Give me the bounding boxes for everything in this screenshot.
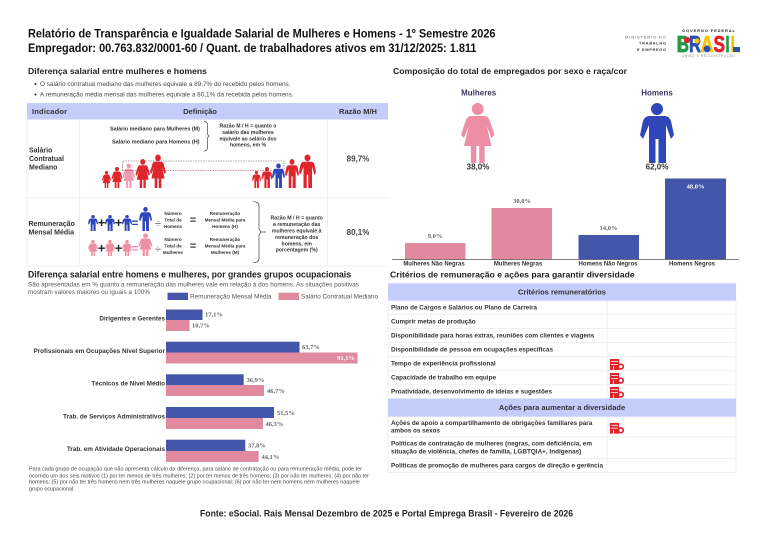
bullets: A remuneração média mensal das mulheres equivale a 80,1% da recebida pelos homens. — [40, 92, 294, 98]
footnote: ocorrido um dos seis motivos (1) por ter menos de três mulheres; (2) por ter menos de três homens; (3) por não ter mulheres; (4) por não ter — [29, 473, 369, 479]
row: remuneração mensal média: = — [131, 216, 139, 230]
logo: ministério: MINISTÉRIO DO — [625, 35, 666, 40]
group: profissionais: 91,1% — [337, 355, 355, 362]
row: remuneração mensal média: Razão M / H = quanto — [271, 216, 323, 222]
title: Empregador: 00.763.832/0001-60 / Quant. de trabalhadores ativos em 31/12/2025: 1.811 — [28, 41, 477, 55]
criteria rows: Proatividade, desenvolvimento de ideias e sugestões — [391, 389, 553, 396]
table header: Indicador — [32, 107, 67, 116]
row: remuneração mensal média: porcentagem (%) — [276, 248, 318, 254]
row: salário contratual mediano: Salário mediano para Homens (H) — [112, 139, 200, 145]
bar chart: composição: Homens Não Negros — [578, 262, 638, 268]
row: remuneração mensal média: Remuneração — [210, 211, 240, 216]
footnote: homens; (5) por não ter três homens nem três mulheres naquele grupo ocupacional; (6) por não ter nem homens nem mulheres naquele — [29, 480, 360, 486]
group: profissionais: Profissionais em Ocupações Nível Superior — [33, 348, 166, 355]
row: remuneração mensal média: Remuneração — [210, 237, 240, 242]
legend: Remuneração Mensal Média — [190, 294, 272, 300]
title: Relatório de Transparência e Igualdade Salarial de Mulheres e Homens - 1º Semestre 2026 — [28, 26, 496, 40]
row: remuneração mensal média: ÷ — [155, 218, 161, 230]
criteria rows — [391, 305, 595, 396]
logo: governo federal brasil — [677, 28, 740, 58]
row: remuneração mensal média: Número — [164, 237, 182, 242]
table header: Razão M/H — [339, 107, 377, 116]
row: remuneração mensal média: Mensal Média para — [205, 218, 246, 222]
description text: mostram valores maiores ou iguais a 100% — [28, 289, 151, 296]
bar chart: composição — [392, 178, 739, 268]
row: remuneração mensal média: Mulheres — [163, 250, 184, 255]
footnote — [29, 467, 369, 492]
row: remuneração mensal média: Mulheres (M) — [211, 250, 240, 255]
group: administrativos: 46,3% — [266, 421, 283, 428]
heading: por grandes grupos: Diferença salarial entre homens e mulheres, por grandes grupos ocupacionais — [28, 270, 351, 280]
icon: mulheres: Mulheres — [461, 89, 497, 98]
row: remuneração mensal média: Homens — [164, 224, 183, 229]
group: técnicos: 46,7% — [267, 388, 285, 395]
description text — [28, 282, 359, 296]
group: administrativos: Trab. de Serviços Administrativos — [63, 413, 165, 420]
icon: people men group — [252, 154, 316, 188]
section header: ações: Ações para aumentar a diversidade — [499, 403, 625, 412]
row: remuneração mensal média: + — [98, 215, 106, 230]
bullets: O salário contratual mediano das mulheres equivale a 89,7% do recebido pelos homens. — [40, 81, 291, 88]
section header: ações — [388, 398, 736, 417]
heading: diferença salarial: Diferença salarial entre mulheres e homens — [28, 66, 207, 76]
row: remuneração mensal média: + — [115, 240, 123, 256]
group: dirigentes: Dirigentes e Gerentes — [99, 316, 165, 323]
group: profissionais: 63,7% — [302, 344, 320, 351]
group: dirigentes: 10,7% — [192, 322, 210, 330]
row: remuneração mensal média — [28, 202, 369, 263]
row: salário contratual mediano: salário das mulheres — [222, 130, 274, 136]
criteria rows: Tempo de experiência profissional — [391, 361, 496, 368]
row: remuneração mensal média: 80,1% — [347, 228, 369, 237]
row: remuneração mensal média: = — [190, 214, 196, 226]
logo: governo federal brasil: UNIÃO E RECONSTRUÇÃO — [682, 53, 735, 58]
group: operacionais: 37,8% — [248, 443, 266, 450]
description text: São apresentadas em % quanto a remuneração das mulheres vale em relação à dos homens. As situações positivas — [28, 282, 359, 289]
logo: ministério — [625, 35, 666, 52]
row: remuneração mensal média: remuneração dos — [275, 235, 318, 241]
row: salário contratual mediano: Salário — [29, 148, 52, 154]
icon: homens: Homens — [641, 89, 673, 98]
bar chart: composição: Mulheres Não Negras — [403, 262, 465, 268]
row: salário contratual mediano: Razão M / H = quanto o — [220, 124, 276, 130]
group: administrativos: 51,5% — [277, 410, 295, 417]
criteria rows: Plano de Cargos e Salários ou Plano de Carreira — [391, 305, 538, 312]
logo: ministério: TRABALHO — [639, 41, 666, 46]
action rows: ambos os sexos — [391, 427, 441, 434]
action rows: Políticas de promoção de mulheres para cargos de direção e gerência — [391, 462, 604, 469]
icon: homens: 62,0% — [646, 162, 668, 171]
row: remuneração mensal média: Remuneração — [28, 221, 75, 228]
legend: Salário Contratual Mediano — [301, 294, 379, 300]
source: Fonte: eSocial. Rais Mensal Dezembro de 2025 e Portal Emprega Brasil - Fevereiro de 2026 — [200, 509, 573, 519]
group: dirigentes: 17,1% — [205, 312, 223, 318]
heading: composição: Composição do total de empregados por sexo e raça/cor — [393, 66, 628, 76]
row: remuneração mensal média: Homens (H) — [212, 224, 238, 229]
icon: homens — [640, 89, 674, 171]
group: técnicos — [91, 374, 285, 396]
logo: ministério: E EMPREGO — [637, 47, 666, 52]
logo: governo federal brasil: I — [726, 31, 730, 57]
icon: mulheres: 38,0% — [467, 162, 489, 171]
bar chart: composição: 48,0% — [687, 184, 704, 191]
action rows: Políticas de contratação de mulheres (negras, com deficiência, em — [391, 441, 593, 448]
icon: critério marcado — [610, 387, 623, 398]
table header — [27, 103, 388, 120]
row: salário contratual mediano: 89,7% — [347, 154, 369, 164]
row: salário contratual mediano — [29, 122, 369, 188]
row: remuneração mensal média: a remuneração das — [273, 222, 320, 228]
panel: criteria table — [388, 283, 736, 472]
action rows: Ações de apoio a compartilhamento de obrigações familiares para — [391, 420, 593, 427]
group: operacionais — [67, 440, 279, 462]
logo: governo federal brasil: R — [689, 31, 701, 57]
row: remuneração mensal média: homens, em — [282, 241, 312, 247]
row: remuneração mensal média: = — [131, 242, 139, 256]
section header: critérios remuneratórios — [388, 283, 736, 301]
row: salário contratual mediano: Salário mediano para Mulheres (M) — [110, 126, 200, 132]
row: remuneração mensal média: Total de — [164, 218, 182, 222]
logo: governo federal brasil: A — [700, 31, 714, 57]
bar chart: composição: Mulheres Negras — [494, 262, 543, 268]
row: remuneração mensal média: mulheres equivale à — [272, 228, 322, 234]
bar chart: composição: 14,0% — [600, 225, 617, 232]
panel: indicator table — [27, 103, 388, 266]
icon: critério marcado — [610, 359, 623, 370]
bar chart: grupos ocupacionais — [33, 310, 358, 462]
section header: critérios remuneratórios: Critérios remuneratórios — [518, 288, 606, 296]
bar chart: composição: 30,0% — [513, 198, 531, 205]
bullets — [34, 81, 294, 98]
logo: governo federal brasil: S — [714, 31, 725, 57]
row: remuneração mensal média: + — [115, 215, 123, 230]
row: salário contratual mediano: equivale ao salário dos — [219, 136, 277, 142]
group: técnicos: 36,9% — [246, 377, 264, 384]
row: remuneração mensal média: Mensal Média para — [205, 244, 246, 248]
formula: men — [88, 207, 152, 231]
group: administrativos — [63, 407, 295, 429]
row: remuneração mensal média: = — [190, 240, 196, 252]
footnote: Para cada grupo de ocupação que não apresenta cálculo da diferença, para salário de contratação ou para remuneração média, pode ter — [29, 467, 362, 473]
group: técnicos: Técnicos de Nível Médio — [91, 381, 165, 388]
criteria rows: Capacidade de trabalho em equipe — [391, 375, 497, 382]
logo: governo federal brasil: L — [730, 31, 740, 57]
icon: people women group — [102, 154, 166, 188]
bar chart: composição: Homens Negros — [669, 262, 716, 268]
criteria rows: Disponibilidade para horas extras, reuniões com clientes e viagens — [391, 333, 595, 340]
action rows: situação de violência, chefes de família, LGBTQIA+, Indígenas) — [391, 448, 581, 455]
logo: governo federal brasil: B — [677, 31, 689, 57]
action rows — [391, 420, 604, 469]
criteria rows: Cumprir metas de produção — [391, 319, 476, 326]
heading: critérios: Critérios de remuneração e ações para garantir diversidade — [390, 270, 635, 280]
row: salário contratual mediano: homens, em % — [230, 142, 267, 148]
icon: ação marcada — [610, 423, 623, 434]
bar chart: composição: 9,0% — [428, 233, 442, 240]
group: operacionais: Trab. em Atividade Operacionais — [67, 446, 165, 453]
footnote: grupo ocupacional. — [29, 486, 75, 492]
title — [28, 26, 496, 55]
group: operacionais: 44,1% — [262, 454, 279, 461]
group: dirigentes — [99, 310, 223, 331]
row: remuneração mensal média: Número — [164, 211, 182, 216]
row: remuneração mensal média: + — [98, 240, 106, 256]
icon: mulheres — [461, 89, 497, 171]
icon: critério marcado — [610, 373, 623, 384]
legend — [168, 293, 379, 300]
formula: women — [88, 234, 152, 256]
row: salário contratual mediano: Contratual — [29, 156, 64, 163]
group: profissionais — [33, 342, 358, 364]
table header: Definição — [183, 107, 217, 116]
criteria rows: Disponibilidade de pessoa em ocupações específicas — [391, 347, 554, 354]
logo: governo federal brasil: GOVERNO FEDERAL — [682, 28, 736, 33]
row: salário contratual mediano: Mediano — [29, 164, 57, 172]
row: remuneração mensal média: Mensal Média — [28, 230, 74, 236]
row: remuneração mensal média: ÷ — [155, 244, 161, 256]
row: remuneração mensal média: Total de — [164, 244, 182, 248]
